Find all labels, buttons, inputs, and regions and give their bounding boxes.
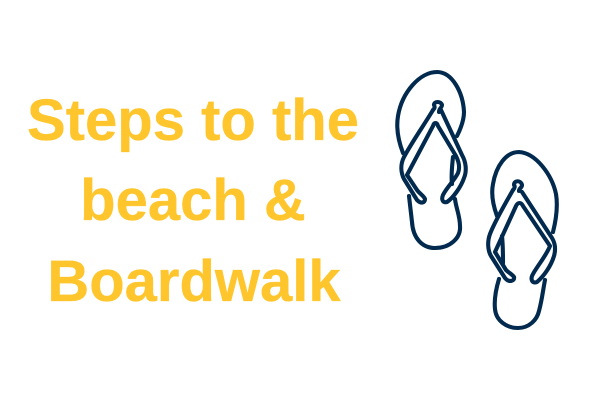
title: Steps to the beach & Boardwalk: beach & [80,168,306,233]
icon: right flip-flop [488,152,557,328]
icon: left flip-flop [397,72,466,248]
title: Steps to the beach & Boardwalk [27,88,359,314]
title: Steps to the beach & Boardwalk: Boardwalk [47,249,341,314]
title: Steps to the beach & Boardwalk: Steps to the [27,88,359,153]
